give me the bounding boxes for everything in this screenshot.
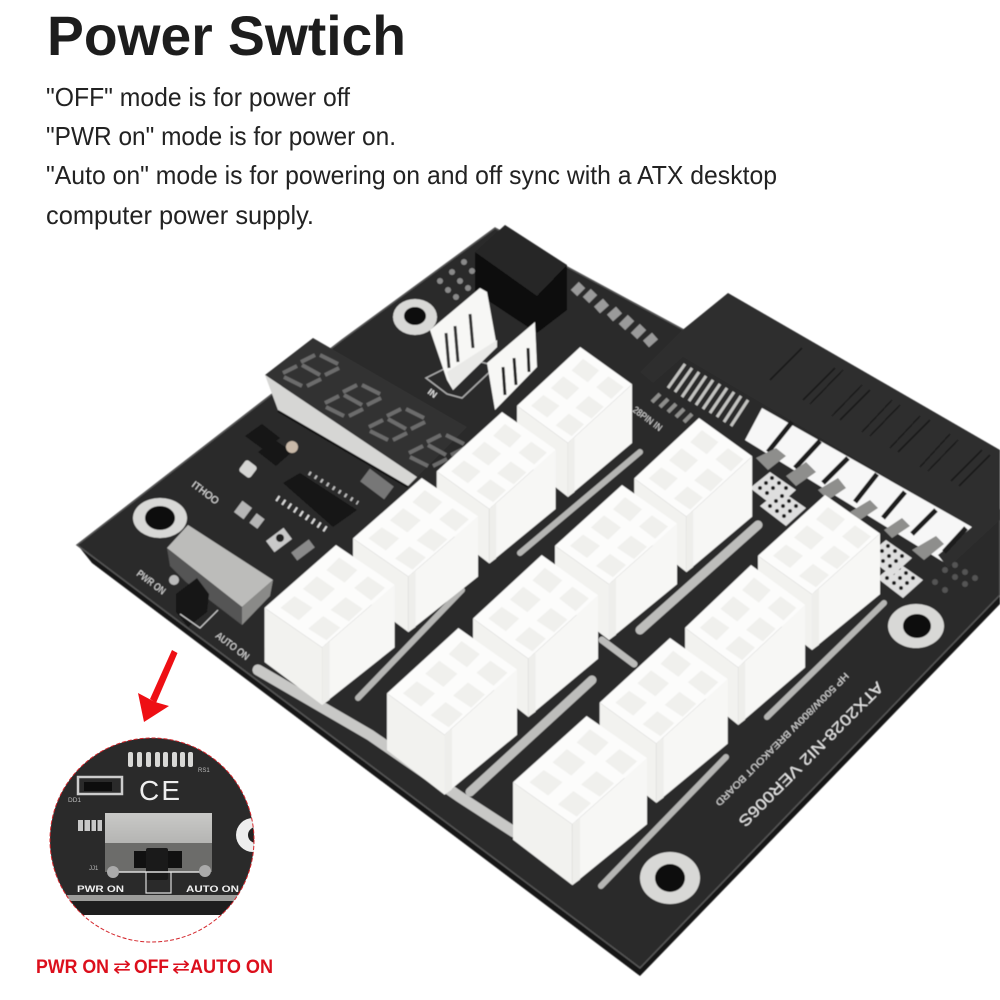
label: IN: IN bbox=[426, 387, 439, 400]
title: Power Swtich bbox=[47, 4, 406, 67]
board underside bbox=[80, 548, 1000, 976]
inset resistor label: RS1 bbox=[198, 768, 210, 774]
inset board bbox=[50, 738, 254, 896]
switch positions caption: AUTO ON bbox=[190, 957, 273, 978]
silkscreen: model name: ATX2028-NI2 VER006S bbox=[735, 678, 886, 829]
silver LED pads bbox=[574, 285, 655, 344]
inset small pads bbox=[78, 820, 102, 831]
28-pin edge connector bbox=[640, 293, 1000, 568]
connector slots bbox=[768, 422, 966, 552]
description text: computer power supply. bbox=[46, 200, 314, 230]
inset CE mark: CE bbox=[139, 775, 186, 806]
description text bbox=[46, 82, 777, 230]
description text: "PWR on" mode is for power on. bbox=[46, 121, 396, 151]
board surface bbox=[77, 228, 1000, 968]
solder bars and rods bbox=[258, 452, 884, 886]
finger pads bbox=[652, 394, 692, 422]
silkscreen: board description: HP 500W/800W BREAKOUT BOARD bbox=[713, 670, 851, 808]
inset diode DD1: DD1 bbox=[68, 797, 81, 804]
solder tabs bbox=[756, 448, 944, 560]
inset label: JJ1: JJ1 bbox=[89, 866, 99, 872]
inset pad row bbox=[128, 752, 193, 767]
switch positions caption: OFF bbox=[134, 957, 169, 978]
gold fingers bbox=[668, 364, 748, 426]
solder dot pads bbox=[750, 472, 978, 598]
red arrow bbox=[138, 650, 178, 722]
small pads near jack bbox=[437, 259, 475, 300]
SMD components bbox=[234, 424, 394, 561]
inset mount hole bbox=[236, 818, 254, 852]
switch positions caption: ⇄ bbox=[172, 956, 190, 978]
7-segment display bbox=[265, 338, 467, 487]
6-pin white power connectors bbox=[265, 347, 880, 885]
fan header OUT bbox=[487, 322, 537, 410]
mounting holes bbox=[133, 299, 944, 904]
description text: "OFF" mode is for power off bbox=[46, 82, 351, 112]
silkscreen: 28PIN IN: 28PIN IN bbox=[630, 405, 664, 434]
inset label: AUTO ON: AUTO ON bbox=[186, 884, 239, 895]
inset diode DD1 bbox=[68, 777, 122, 804]
description text: "Auto on" mode is for powering on and off sync with a ATX desktop bbox=[46, 160, 777, 190]
black power jack bbox=[475, 225, 567, 333]
zoom inset: switch close-up bbox=[50, 738, 270, 942]
inset slide switch bbox=[105, 813, 212, 893]
circuit board photo bbox=[77, 225, 1000, 976]
fan header IN bbox=[426, 288, 497, 400]
inset label: PWR ON: PWR ON bbox=[77, 884, 124, 895]
silkscreen: AUTO ON: AUTO ON bbox=[213, 631, 251, 663]
switch positions caption bbox=[36, 956, 273, 978]
silkscreen: PWR ON: PWR ON bbox=[134, 569, 167, 597]
silkscreen: ITHOO: ITHOO bbox=[189, 480, 221, 507]
switch positions caption: PWR ON bbox=[36, 957, 109, 978]
main slide switch bbox=[167, 525, 273, 628]
switch positions caption: ⇄ bbox=[113, 956, 131, 978]
